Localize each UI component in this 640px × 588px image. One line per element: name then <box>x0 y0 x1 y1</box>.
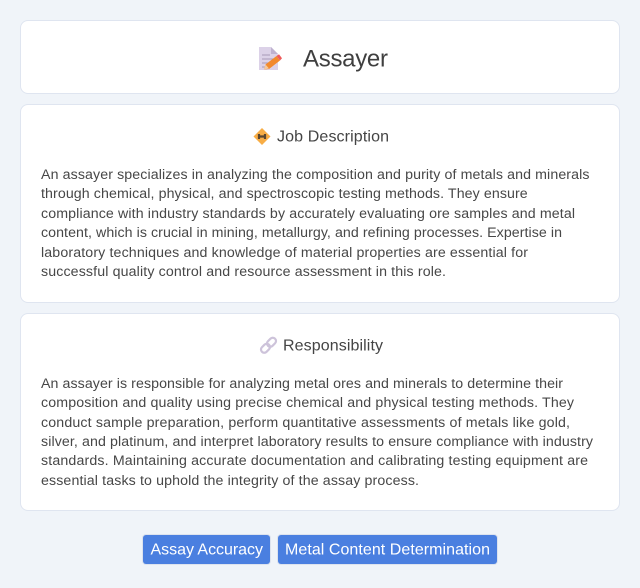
text block: responsibility: silver, and platinum, and interpret laboratory results to ensure compliance with industry <box>41 434 594 450</box>
text block: responsibility: essential tasks to uphold the integrity of the assay process. <box>41 473 419 489</box>
text block: responsibility: An assayer is responsible for analyzing metal ores and minerals to determine their <box>41 376 563 392</box>
text block: responsibility: conduct sample preparation, perform quantitative assessments of metals like gold, <box>41 415 570 431</box>
panel: job description card <box>20 104 620 303</box>
text block: job description: through chemical, physical, and spectroscopic testing methods. They ensure <box>41 186 528 202</box>
tag label: assay accuracy: Assay Accuracy <box>150 542 263 558</box>
icon: diamond sign <box>254 128 270 145</box>
heading: responsibility: Responsibility <box>283 338 383 354</box>
text block: responsibility: composition and quality using precise chemical and physical testing methods. They <box>41 395 575 411</box>
text block: job description <box>41 167 590 280</box>
tag background: assay accuracy <box>143 535 270 564</box>
icon: document with pencil <box>259 47 282 70</box>
text block: responsibility <box>41 376 594 489</box>
panel: title card <box>20 20 620 94</box>
text block: job description: content, which is crucial in mining, metallurgy, and refining processes. Expertise in <box>41 225 562 241</box>
text block: job description: compliance with industry standards by accurately evaluating ore samples and metal <box>41 206 575 222</box>
text block: job description: laboratory techniques and knowledge of material properties are essential for <box>41 245 528 261</box>
heading: job description: Job Description <box>277 128 389 146</box>
tag background: metal content determination <box>278 535 497 564</box>
title: Assayer <box>303 46 388 72</box>
text block: responsibility: standards. Maintaining accurate documentation and calibrating testing equipment are <box>41 453 588 469</box>
panel: responsibility card <box>20 313 620 511</box>
text block: job description: successful quality control and resource assessment in this role. <box>41 264 446 280</box>
text block: job description: An assayer specializes in analyzing the composition and purity of metals and minerals <box>41 167 590 183</box>
tag label: metal content determination: Metal Content Determination <box>285 542 490 558</box>
icon: chain link <box>260 336 277 354</box>
